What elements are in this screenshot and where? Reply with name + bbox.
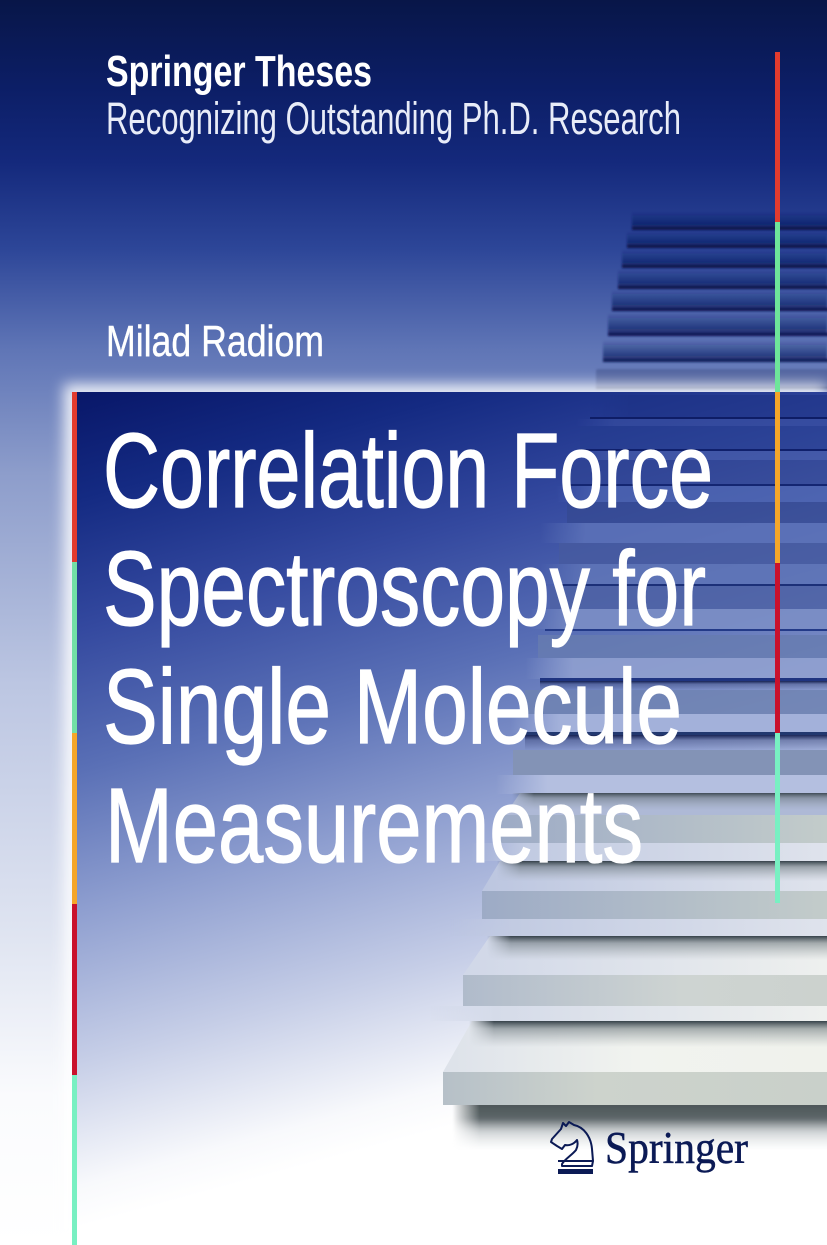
glow around title panel [64, 384, 827, 1245]
publisher name: Springer [605, 1123, 748, 1173]
left colour bar [72, 392, 77, 1245]
series title: Springer Theses [106, 47, 372, 96]
book title [103, 412, 713, 885]
right colour bar [775, 52, 780, 903]
title panel [72, 392, 827, 1245]
step shadow on ground [454, 1105, 827, 1146]
step: upper panel steps [525, 395, 827, 679]
step: third from bottom [482, 861, 827, 919]
icon: knight [551, 1122, 593, 1174]
step: second from bottom [430, 936, 827, 1021]
author: Milad Radiom [106, 317, 324, 366]
book title: Measurements [105, 767, 643, 885]
step: lower panel steps [470, 678, 827, 861]
publisher logo [551, 1122, 748, 1174]
step: bottom step [443, 1021, 827, 1072]
staircase [430, 395, 827, 1150]
upper stairs above title panel [596, 212, 827, 389]
